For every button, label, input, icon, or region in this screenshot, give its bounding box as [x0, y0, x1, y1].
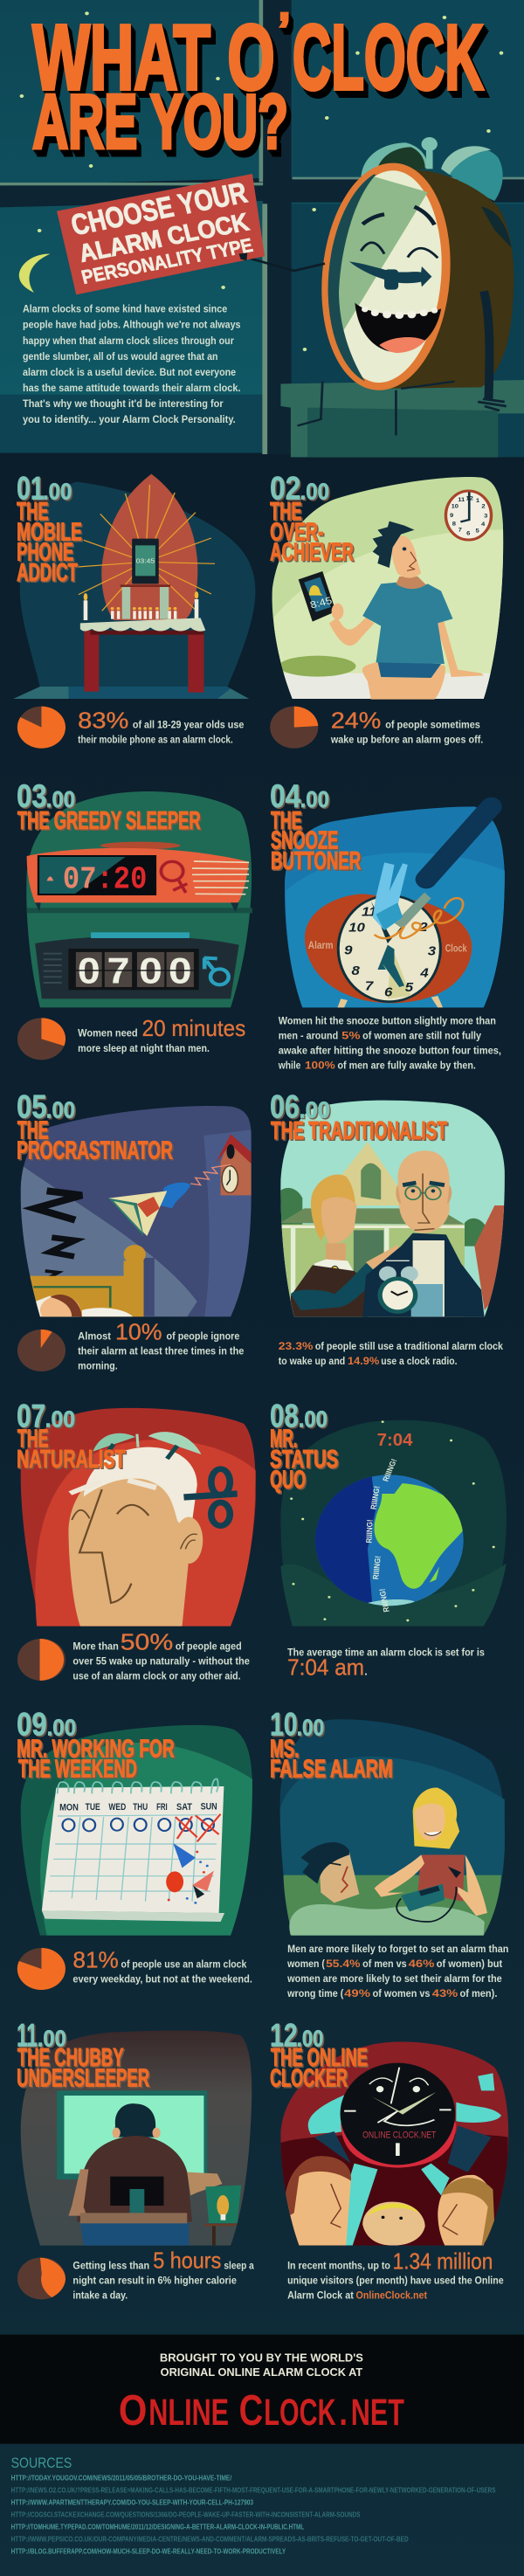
stat text: 7:04 am — [287, 1654, 364, 1680]
number and heading: THE — [17, 497, 48, 526]
man from behind — [114, 2103, 157, 2137]
calendar day headers: SUN — [201, 1800, 217, 1812]
logo: online clock.net: NET — [351, 2391, 404, 2433]
intro text: That's why we thought it'd be interesting for — [23, 397, 224, 410]
candles — [84, 599, 198, 620]
stat text: 14.9% — [348, 1355, 380, 1367]
logo: online clock.net: C — [239, 2386, 263, 2434]
stat text: use of an alarm clock or any other aid. — [72, 1669, 241, 1682]
stat text: OnlineClock.net — [356, 2289, 428, 2301]
stat text — [72, 2248, 254, 2301]
source urls — [11, 2474, 496, 2555]
clock numerals: 11 — [362, 905, 376, 919]
sign: choose your alarm clock personality type: PERSONALITY TYPE — [79, 235, 255, 288]
number and heading: THE ONLINE — [271, 2043, 368, 2072]
stat text: use a clock radio. — [381, 1355, 457, 1367]
number and heading: PHONE — [17, 538, 73, 566]
illustration: man woken before alarm: 6 — [466, 530, 470, 537]
stat text — [78, 1319, 244, 1371]
number and heading — [17, 1398, 126, 1474]
stat text: of men are fully awake by then. — [337, 1059, 476, 1071]
stat text: of people use an alarm clock — [121, 1958, 247, 1970]
pie chart: 83% — [17, 707, 66, 749]
intro text: people have had jobs. Although we're not always — [23, 319, 241, 330]
bench — [280, 380, 524, 457]
display 0700: 0 — [169, 950, 192, 991]
calendar day headers: TUE — [86, 1801, 100, 1813]
number and heading: 01 — [17, 470, 45, 507]
logo: online clock.net: . — [339, 2391, 348, 2433]
illustration: man woken before alarm: 5 — [476, 528, 479, 534]
illustration: hammer smashing clock: Alarm — [308, 939, 334, 951]
icon: male symbol — [203, 958, 229, 984]
panel 06: the traditionalist — [270, 1088, 508, 1367]
stat text: More than — [72, 1640, 119, 1652]
illustration: phone altar — [13, 474, 255, 699]
stat text: of people sometimes — [385, 718, 480, 730]
clock numerals: 4 — [419, 966, 429, 980]
number and heading: MR. WORKING FOR — [17, 1735, 175, 1763]
number and heading: .00 — [38, 2026, 66, 2051]
number and heading: SNOOZE — [271, 826, 338, 854]
stat text — [279, 1340, 504, 1367]
stat text: sleep a — [224, 2259, 254, 2271]
footer banner — [0, 2335, 524, 2444]
number and heading: .00 — [300, 787, 329, 812]
illustration: phone altar: 03:45 — [136, 557, 155, 565]
hands as moustache — [349, 261, 431, 287]
clock numerals: 6 — [384, 986, 393, 999]
number and heading: THE CHUBBY — [17, 2043, 124, 2072]
number and heading: .00 — [46, 787, 75, 812]
intro text: gentle slumber, all of us would agree that an — [23, 350, 218, 363]
number and heading: OVER- — [270, 517, 323, 546]
logo: online clock.net: NLINE — [148, 2391, 229, 2433]
number and heading: .00 — [297, 2026, 323, 2051]
number and heading — [270, 778, 361, 875]
megaphone — [108, 1191, 167, 1236]
stat text: 24% — [331, 708, 381, 733]
bells — [93, 1433, 135, 1452]
calendar rings — [58, 1779, 218, 1793]
number and heading: ADDICT — [17, 558, 78, 587]
intro text — [23, 302, 241, 425]
party items — [173, 1843, 196, 1868]
pie chart: 5 hours — [17, 2257, 66, 2299]
riiing labels — [364, 1458, 399, 1613]
character: alarm clock — [242, 137, 524, 457]
title: ’ — [279, 4, 290, 53]
illustration: head with clock parts — [21, 1408, 256, 1626]
stat text: Almost — [78, 1329, 112, 1342]
pie chart: 24% — [270, 707, 318, 749]
stat text: more sleep at night than men. — [78, 1042, 210, 1054]
calendar day headers: MON — [59, 1801, 79, 1813]
illustration: man woken before alarm: 10 — [452, 503, 458, 509]
number and heading: .00 — [47, 1715, 76, 1740]
stat text: over 55 wake up naturally - without the — [72, 1654, 250, 1667]
number and heading: 03 — [17, 778, 47, 814]
clock numerals: 7 — [365, 979, 375, 993]
arms and legs — [242, 256, 325, 271]
baby — [362, 2202, 425, 2246]
sign: choose your alarm clock personality type — [57, 174, 265, 294]
number and heading: .00 — [45, 1406, 75, 1432]
number and heading: PROCRASTINATOR — [17, 1136, 173, 1164]
stars — [20, 11, 503, 351]
stat text: to wake up and — [279, 1355, 345, 1367]
number and heading: .00 — [46, 1097, 75, 1122]
intro text: Alarm clocks of some kind have existed since — [23, 302, 227, 314]
stars — [290, 1420, 495, 1621]
icon: crescent moon — [19, 254, 50, 293]
hammer — [426, 806, 491, 880]
illustration: man woken before alarm: 8:45 — [308, 595, 334, 611]
banner text: BROUGHT TO YOU BY THE WORLD'S — [160, 2352, 363, 2364]
stat text: night can result in 6% higher calorie — [72, 2275, 237, 2286]
display 0700: 0 — [139, 950, 162, 991]
source urls: HTTP://WWW.APARTMENTTHERAPY.COM/DO-YOU-SLEEP-WITH-YOUR-CELL-PH-127903 — [11, 2498, 253, 2506]
illustration: man woken before alarm: 11 — [458, 496, 465, 503]
calendar day headers: FRI — [156, 1801, 168, 1813]
illustration: man woken before alarm: 12 — [465, 495, 473, 502]
source urls: HTTP://COGSCI.STACKEXCHANGE.COM/QUESTIONS/1366/DO-PEOPLE-WAKE-UP-FASTER-WITH-INCONSISTENT-ALARM-SOUNDS — [11, 2510, 361, 2518]
intro text: alarm clock is a useful device. But not everyone — [23, 366, 236, 378]
clock body — [375, 170, 514, 389]
stat text: of women are still not fully — [362, 1029, 482, 1041]
pie chart: 50% — [17, 1639, 66, 1681]
number and heading: THE — [270, 497, 302, 526]
sign: choose your alarm clock personality type: CHOOSE YOUR — [68, 176, 251, 242]
sources heading: SOURCES — [11, 2455, 72, 2471]
header panel: night window — [0, 0, 524, 457]
number and heading: 06 — [270, 1088, 300, 1125]
cuckoo clock — [220, 1147, 252, 1195]
stat text: every weekday, but not at the weekend. — [72, 1972, 252, 1985]
source urls: HTTP://TODAY.YOUGOV.COM/NEWS/2011/05/05/BROTHER-DO-YOU-HAVE-TIME/ — [11, 2474, 232, 2482]
pie chart: 81% — [17, 1948, 66, 1990]
number and heading: THE — [17, 1425, 48, 1453]
stat text: In recent months, up to — [287, 2259, 390, 2271]
stat text — [286, 1943, 508, 1999]
illustration: man woken before alarm: 7 — [458, 527, 462, 534]
stat text: 5 hours — [153, 2248, 221, 2273]
illustration: man woken before alarm: 1 — [476, 497, 479, 504]
banner text: ORIGINAL ONLINE ALARM CLOCK AT — [161, 2366, 363, 2379]
number and heading: FALSE ALARM — [270, 1754, 393, 1783]
stat text: men - around — [279, 1029, 338, 1041]
stat text: of men vs — [362, 1958, 407, 1970]
display 0700: 7 — [107, 950, 129, 991]
banner text — [160, 2352, 363, 2379]
stat text: their alarm at least three times in the — [78, 1345, 244, 1357]
display 0700 — [78, 950, 192, 991]
number and heading: 08 — [270, 1398, 299, 1434]
illustration: calendar — [21, 1725, 252, 1936]
number and heading: STATUS — [270, 1445, 338, 1474]
stat text: . — [364, 1665, 368, 1677]
illustration: robot clock and family — [278, 2038, 511, 2248]
unplugged clock — [401, 1884, 445, 1911]
number and heading: 11 — [17, 2017, 38, 2054]
number and heading: THE WEEKEND — [18, 1754, 137, 1783]
stat text: Getting less than — [72, 2259, 149, 2271]
stat text: while — [278, 1059, 300, 1071]
number and heading: MR. — [270, 1425, 298, 1453]
wall clock — [445, 491, 491, 540]
stat text: of women) but — [437, 1958, 503, 1970]
stat text: 20 minutes — [142, 1016, 245, 1041]
pie chart: 10% — [17, 1329, 66, 1371]
number and heading: 12 — [270, 2017, 298, 2054]
illustration: man woken before alarm: 4 — [481, 521, 485, 528]
number and heading: 05 — [17, 1088, 47, 1125]
woman — [413, 1787, 459, 1849]
time label: 7:04 — [377, 1429, 413, 1450]
stat text — [78, 708, 244, 745]
number and heading: CLOCKER — [270, 2063, 348, 2092]
sign: choose your alarm clock personality type: ALARM CLOCK — [76, 208, 252, 267]
number and heading: .00 — [297, 1715, 324, 1740]
bells — [361, 142, 428, 181]
stat text: 49% — [344, 1987, 371, 1999]
alarm icons — [63, 1819, 214, 1831]
stat text: 43% — [432, 1987, 458, 1999]
clock face — [341, 2123, 456, 2168]
calendar day headers: THU — [133, 1801, 148, 1813]
stat text — [78, 1016, 245, 1054]
source urls: HTTP://BLOG.BUFFERAPP.COM/HOW-MUCH-SLEEP-DO-WE-REALLY-NEED-TO-WORK-PRODUCTIVELY — [11, 2547, 286, 2555]
spring — [375, 898, 463, 938]
zzz — [35, 1191, 82, 1282]
panel 03: the greedy sleeper — [17, 778, 252, 1060]
clock numerals: 3 — [428, 944, 436, 958]
stat text: of men). — [460, 1987, 497, 1999]
stat text: 1.34 million — [393, 2248, 493, 2274]
stat text: 10% — [115, 1319, 162, 1344]
stat text: women ( — [286, 1958, 326, 1970]
zigzag spring and bird — [190, 1164, 231, 1185]
stat text: 81% — [72, 1947, 119, 1972]
stat text: 83% — [78, 708, 128, 733]
riiing labels: RIIING! — [381, 1458, 399, 1482]
stat text: Women need — [78, 1027, 138, 1039]
eyebrows and eyes — [362, 207, 434, 224]
number and heading — [17, 1088, 173, 1164]
panel 12: the online clocker — [270, 2017, 511, 2301]
bed — [30, 1276, 125, 1318]
clock numerals: 9 — [344, 944, 353, 957]
calendar day headers — [59, 1800, 217, 1813]
number and heading: MS. — [270, 1735, 299, 1763]
illustration: globe — [280, 1420, 507, 1626]
stat text — [278, 1015, 501, 1071]
number and heading: 02 — [270, 470, 300, 507]
title: WHAT O — [32, 6, 275, 109]
number and heading: .00 — [299, 1097, 330, 1122]
panel 10: ms. false alarm — [270, 1706, 508, 1999]
number and heading — [270, 2017, 368, 2092]
calendar day headers: SAT — [176, 1801, 192, 1813]
illustration: man at computer — [21, 2030, 252, 2246]
left man — [284, 2156, 351, 2248]
stat text: 46% — [409, 1958, 435, 1970]
stat text: 55.4% — [326, 1958, 361, 1970]
number and heading: .00 — [299, 1406, 328, 1432]
calendar day headers: WED — [108, 1801, 126, 1813]
stat text: wake up before an alarm goes off. — [330, 734, 483, 745]
number and heading: UNDERSLEEPER — [17, 2063, 149, 2092]
number and heading — [270, 1088, 447, 1145]
number and heading: 09 — [17, 1706, 47, 1743]
number and heading: .00 — [43, 479, 72, 504]
illustration: American Gothic couple — [278, 1095, 508, 1319]
stat text — [287, 1647, 485, 1680]
stat text — [72, 1947, 252, 1985]
illustration: man woken before alarm: 8 — [452, 521, 456, 527]
illustration: man woken before alarm: 3 — [484, 513, 487, 520]
number and heading: THE — [17, 1115, 48, 1144]
title: ARE YOU? — [32, 79, 288, 165]
number and heading: ACHIEVER — [270, 538, 354, 566]
display 07:20: 07:20 — [63, 862, 147, 898]
number and heading: THE GREEDY SLEEPER — [17, 806, 201, 835]
source urls: HTTP://TOMHUME.TYPEPAD.COM/TOMHUME/2011/12/DESIGNING-A-BETTER-ALARM-CLOCK-IN-PUBLIC.HTML — [11, 2523, 304, 2531]
illustration: two alarm clocks — [26, 791, 252, 1007]
panel 11: the chubby undersleeper — [17, 2017, 254, 2301]
number and heading — [17, 470, 82, 587]
number and heading — [270, 1398, 338, 1494]
sources — [11, 2455, 496, 2555]
riiing labels: RIIING! — [369, 1485, 382, 1510]
stat text: of people aged — [176, 1640, 242, 1652]
number and heading: QUO — [270, 1465, 306, 1494]
face — [318, 163, 454, 390]
stat text — [72, 1629, 250, 1682]
icon: female symbol — [161, 861, 187, 893]
stat text — [330, 708, 483, 745]
clock numerals: 10 — [348, 922, 365, 935]
man — [397, 1150, 450, 1233]
phone — [132, 539, 159, 584]
robot arms — [308, 2095, 348, 2134]
intro text: has the same attitude towards their alarm clock. — [23, 382, 241, 394]
riiing labels: RIIING! — [377, 1588, 391, 1613]
man — [362, 662, 445, 700]
right person — [438, 2175, 488, 2246]
face lines — [72, 1489, 148, 1603]
panel 09: mr. working for the weekend — [17, 1706, 252, 1990]
stat text: 5% — [341, 1029, 361, 1041]
stat text: morning. — [78, 1360, 118, 1371]
clock numerals — [344, 905, 436, 999]
panel 02: the over-achiever — [270, 470, 508, 749]
stat text: 23.3% — [279, 1340, 314, 1352]
number and heading: .00 — [300, 479, 329, 504]
panel 08: mr. status quo — [270, 1398, 507, 1680]
clock numerals: 8 — [352, 964, 360, 978]
number and heading — [17, 778, 201, 835]
number and heading — [270, 470, 354, 566]
key — [211, 1469, 230, 1526]
number and heading: BUTTONER — [271, 846, 361, 875]
panel 05: the procrastinator — [13, 1088, 258, 1371]
pie chart: women vs men sleep — [17, 1018, 66, 1060]
illustration: couple in bed — [280, 1719, 505, 1936]
stat text: wrong time ( — [286, 1987, 344, 1999]
stat text: 50% — [121, 1629, 173, 1654]
sleeper — [35, 1295, 80, 1316]
intro text: you to identify... your Alarm Clock Personality. — [23, 413, 236, 425]
stat text: 100% — [305, 1059, 335, 1071]
stat text: of women vs — [373, 1987, 430, 1999]
panel 07: the naturalist — [17, 1398, 256, 1682]
stat text: their mobile phone as an alarm clock. — [78, 734, 233, 745]
panel 01: the mobile phone addict — [13, 470, 255, 749]
clock numerals: 5 — [405, 981, 413, 995]
intro text: happy when that alarm clock slices through our — [23, 335, 234, 347]
number and heading — [17, 1706, 175, 1783]
drumstick bucket — [205, 2186, 241, 2223]
clock numerals: 2 — [418, 921, 428, 935]
illustration: cuckoo clock and sleeper — [21, 1106, 252, 1317]
illustration: man woken before alarm — [272, 477, 508, 700]
riiing labels: RIIING! — [371, 1556, 383, 1579]
panel 04: the snooze buttoner — [270, 778, 505, 1071]
alarm clock — [386, 1260, 410, 1261]
logo: online clock.net — [119, 2386, 404, 2434]
illustration: robot clock and family: ONLINE CLOCK.NET — [362, 2131, 436, 2140]
display 0700: 0 — [78, 950, 100, 991]
man — [319, 1852, 359, 1903]
illustration: hammer smashing clock — [285, 806, 505, 1007]
stat text: Alarm Clock at — [287, 2289, 354, 2301]
title — [32, 4, 484, 165]
illustration: man woken before alarm: 9 — [450, 512, 453, 519]
number and heading: 07 — [17, 1398, 45, 1434]
stat text: of all 18-29 year olds use — [133, 718, 244, 730]
number and heading: MOBILE — [17, 517, 82, 546]
stat text: intake a day. — [72, 2289, 128, 2301]
illustration: hammer smashing clock: Clock — [445, 942, 467, 954]
logo: online clock.net: O — [119, 2386, 147, 2434]
logo: online clock.net: LOCK — [264, 2391, 336, 2433]
stat text — [287, 2248, 504, 2301]
number and heading: 04 — [270, 778, 301, 814]
stat text: of people ignore — [167, 1329, 239, 1342]
riiing labels: RIIING! — [364, 1519, 375, 1544]
table — [84, 631, 99, 692]
number and heading: 10 — [270, 1706, 298, 1743]
number and heading — [270, 1706, 393, 1783]
mouth — [355, 303, 441, 352]
number and heading: NATURALIST — [17, 1445, 126, 1474]
phone in hand — [299, 571, 336, 622]
number and heading: THE — [271, 806, 302, 835]
number and heading — [17, 2017, 149, 2092]
woman — [311, 1175, 355, 1240]
illustration: man woken before alarm: 2 — [481, 503, 486, 510]
